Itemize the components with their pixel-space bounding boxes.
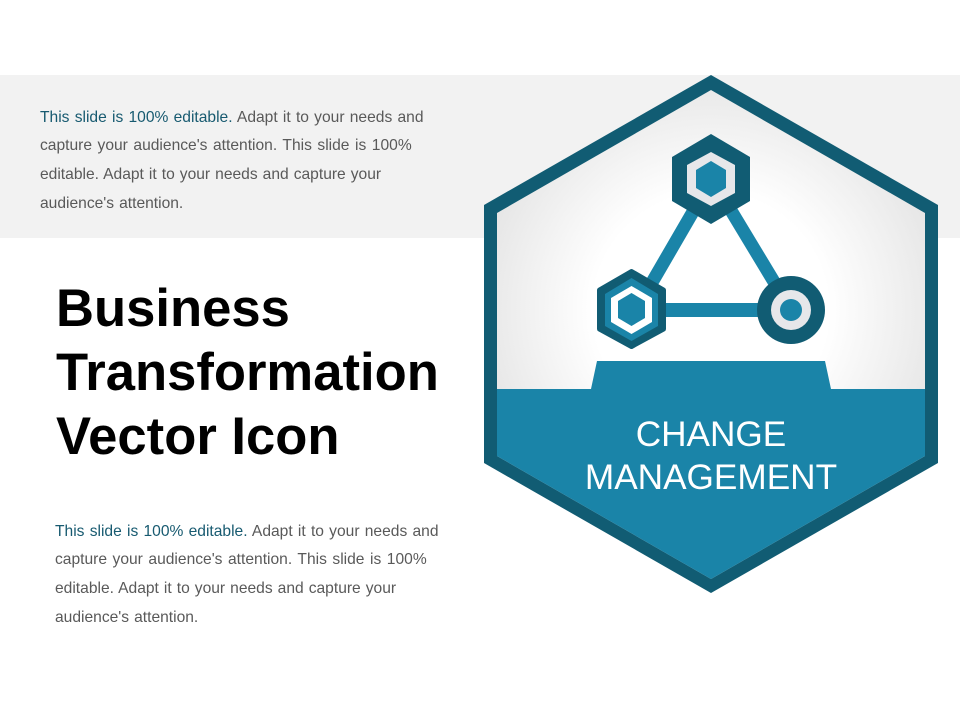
bottom text block: This slide is 100% editable. Adapt it to your needs and [55,523,438,540]
badge outer border [484,75,938,593]
title: Business [56,279,290,338]
title: Transformation [56,343,439,402]
right circle node [757,276,825,344]
top text block [40,109,424,212]
badge label: MANAGEMENT [585,458,837,497]
bottom text block: audience's attention. [55,609,198,626]
bottom text block: editable. Adapt it to your needs and capture your [55,580,396,597]
top hexagon node [672,134,750,224]
top grey band [0,75,960,238]
top text block: editable. Adapt it to your needs and capture your [40,166,381,183]
title: Vector Icon [56,407,340,466]
hexagon badge [484,75,938,593]
network icon [600,134,825,346]
badge banner with tab [497,361,925,579]
left hexagon node [600,272,664,346]
bottom text block [55,523,438,626]
top text block: capture your audience's attention. This slide is 100% [40,137,412,154]
badge label: CHANGE [636,415,786,454]
top text block: This slide is 100% editable. Adapt it to your needs and [40,109,424,126]
top text block: audience's attention. [40,195,183,212]
bottom text block: capture your audience's attention. This slide is 100% [55,551,427,568]
title [56,279,439,466]
connector lines [631,179,791,310]
badge inner field [497,90,925,579]
